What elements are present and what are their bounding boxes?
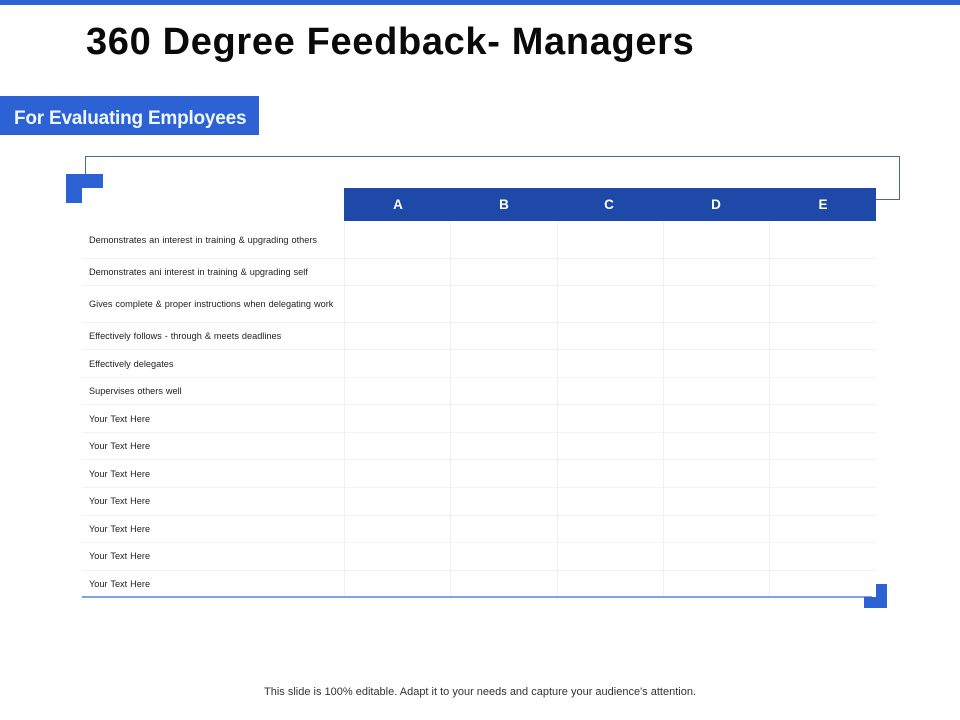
row label 1: Demonstrates an interest in training & upgrading others: [89, 235, 317, 245]
row label 13: Your Text Here: [89, 579, 150, 589]
row label 7: Your Text Here: [89, 414, 150, 424]
row label 5: Effectively delegates: [89, 359, 174, 369]
footer note: This slide is 100% editable. Adapt it to your needs and capture your audience's attention.: [264, 686, 696, 698]
section badge: [0, 96, 259, 135]
column heading A: A: [393, 197, 403, 212]
top-left corner accent: [66, 174, 103, 203]
table header band: [344, 188, 876, 221]
column heading D: D: [711, 197, 721, 212]
row label 6: Supervises others well: [89, 386, 182, 396]
column heading B: B: [499, 197, 509, 212]
column heading C: C: [604, 197, 614, 212]
column heading E: E: [818, 197, 828, 212]
table bottom rule: [82, 596, 872, 598]
row label 12: Your Text Here: [89, 551, 150, 561]
row label 2: Demonstrates ani interest in training & upgrading self: [89, 267, 308, 277]
top accent bar: [0, 0, 960, 5]
row label 11: Your Text Here: [89, 524, 150, 534]
row label 4: Effectively follows - through & meets deadlines: [89, 331, 281, 341]
row label 3: Gives complete & proper instructions when delegating work: [89, 299, 333, 309]
bottom-right corner accent: [864, 584, 887, 608]
row label 10: Your Text Here: [89, 496, 150, 506]
row label 8: Your Text Here: [89, 441, 150, 451]
title: 360 Degree Feedback- Managers: [86, 21, 694, 63]
row label 9: Your Text Here: [89, 469, 150, 479]
section badge: For Evaluating Employees: [14, 108, 246, 129]
